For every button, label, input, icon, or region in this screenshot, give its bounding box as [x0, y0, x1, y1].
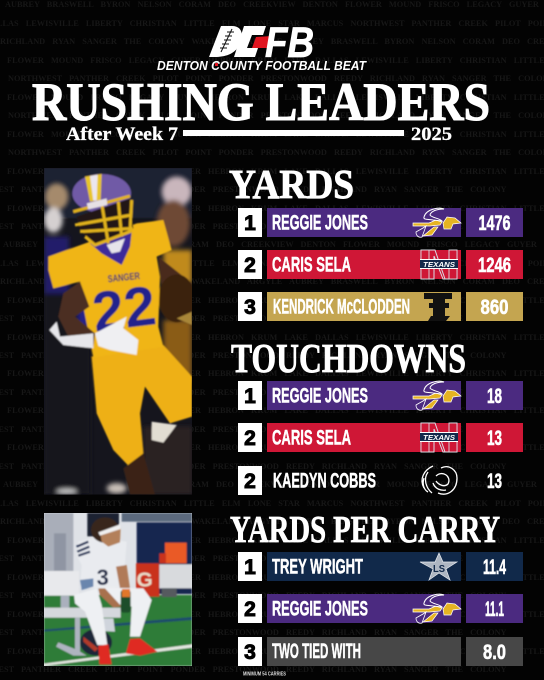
row: yards per carry 3: [238, 637, 523, 666]
row: touchdowns 3: [238, 466, 502, 495]
photo: Lone Star player on bench: 3: [97, 565, 109, 590]
row: yards 1: [238, 208, 523, 237]
row: touchdowns 3: 13: [487, 470, 502, 493]
row: yards 2: TEXANS: [423, 260, 455, 269]
row: yards per carry 3: 3: [244, 641, 256, 664]
row: yards per carry 3: TWO TIED WITH: [272, 640, 361, 663]
background pattern of school names: NORTHWEST PANTHER CREEK PILOT POINT PONDER PRESTONWOOD REEDY RICHLAND RYAN SANGER THE COLONY: [8, 74, 544, 83]
row: yards 2: 2: [244, 254, 256, 277]
row: touchdowns 2: 2: [244, 427, 256, 450]
title: RUSHING LEADERS: [32, 72, 490, 132]
row: yards 2: CARIS SELA: [272, 254, 351, 276]
row: yards per carry 2: 11.1: [485, 598, 504, 621]
subtitle rule: [183, 130, 404, 136]
logo: DCFB: [157, 19, 367, 73]
row: yards 1: 1: [244, 212, 256, 235]
photo: Lone Star player on bench: G: [137, 569, 153, 592]
row: touchdowns 2: TEXANS: [423, 433, 455, 442]
logo: DCFB: FB: [265, 19, 314, 67]
photo: Sanger running back: [44, 168, 195, 495]
row: touchdowns 1: 18: [487, 385, 502, 408]
row: yards 3: 860: [480, 296, 508, 319]
row: yards 3: [238, 292, 523, 321]
photo: Lone Star player on bench: [44, 513, 192, 666]
row: yards per carry 1: TREY WRIGHT: [272, 556, 363, 578]
row: yards per carry 1: 11.4: [483, 556, 506, 579]
row: touchdowns 2: CARIS SELA: [272, 426, 351, 450]
row: yards per carry 3: 8.0: [483, 641, 506, 664]
row: yards per carry 1: LS: [433, 564, 445, 575]
subtitle: year: 2025: [411, 124, 452, 145]
row: yards 1: REGGIE JONES: [272, 212, 368, 234]
row: yards per carry 1: [238, 552, 523, 581]
background pattern of school names: NORTHWEST PANTHER CREEK PILOT POINT PONDER PRESTONWOOD REEDY RICHLAND RYAN SANGER THE COLONY: [8, 148, 544, 157]
row: touchdowns 1: [238, 381, 523, 410]
subtitle: after week 7: After Week 7: [66, 124, 179, 145]
row: touchdowns 1: REGGIE JONES: [272, 384, 368, 408]
row: yards 3: 3: [244, 296, 256, 319]
row: touchdowns 2: [238, 423, 523, 452]
row: yards 2: [238, 250, 523, 279]
logo: DCFB: DENTON COUNTY FOOTBALL BEAT: [157, 58, 367, 73]
footnote: minimum carries: MINIMUM 54 CARRIES: [243, 672, 286, 678]
section heading: yards: YARDS: [229, 161, 354, 207]
row: touchdowns 3: KAEDYN COBBS: [273, 470, 376, 492]
photo: Sanger running back: 22: [89, 273, 159, 344]
row: touchdowns 3: 2: [244, 470, 256, 493]
row: yards 3: KENDRICK McCLODDEN: [273, 296, 410, 318]
row: yards per carry 2: REGGIE JONES: [272, 598, 368, 620]
row: touchdowns 1: 1: [244, 385, 256, 408]
row: yards per carry 2: 2: [244, 598, 256, 621]
row: yards 2: 1246: [478, 254, 511, 277]
photo: Sanger running back: SANGER: [107, 271, 140, 285]
row: yards per carry 1: 1: [244, 556, 256, 579]
section heading: touchdowns: TOUCHDOWNS: [231, 335, 466, 381]
row: yards 1: 1476: [478, 212, 510, 235]
row: touchdowns 2: 13: [487, 427, 502, 450]
background pattern of school names: NORTHWEST PANTHER CREEK PILOT POINT PONDER PRESTONWOOD REEDY RICHLAND RYAN SANGER THE COLONY: [8, 111, 544, 120]
row: yards per carry 2: [238, 594, 523, 623]
